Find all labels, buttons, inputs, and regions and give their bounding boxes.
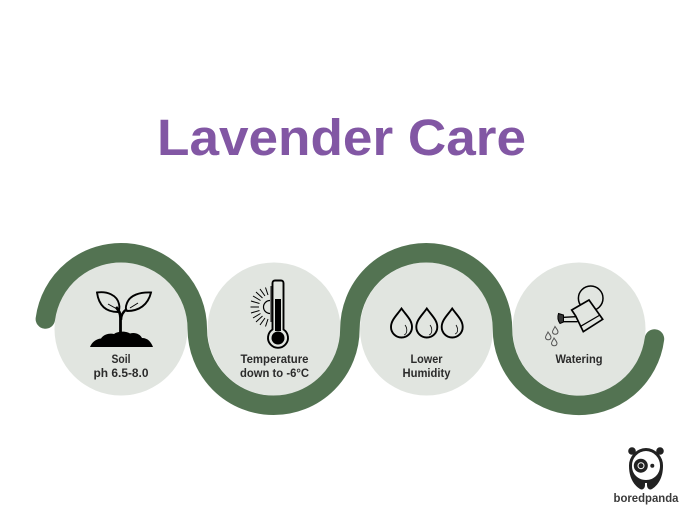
panel: soil circle <box>54 262 188 396</box>
panel: watering circle <box>512 262 646 396</box>
label: temperature: Temperature <box>240 354 308 366</box>
panel: temperature circle <box>208 262 340 396</box>
title: Lavender Care <box>157 109 526 166</box>
label: soil: ph 6.5-8.0 <box>94 368 148 380</box>
icon: thermometer with sun <box>250 280 288 348</box>
logo: boredpanda <box>614 447 679 505</box>
label: lower humidity: Humidity <box>402 368 451 380</box>
label: soil: Soil <box>112 354 130 366</box>
label: lower humidity <box>402 354 451 380</box>
winding green ribbon <box>45 253 654 405</box>
label: soil <box>94 354 148 380</box>
label: temperature: down to -6°C <box>240 368 309 380</box>
logo: boredpanda: boredpanda <box>614 493 679 505</box>
label: temperature <box>240 354 309 380</box>
icon: three water drops <box>391 308 463 338</box>
label: lower humidity: Lower <box>410 354 443 366</box>
icon: watering can <box>546 286 603 346</box>
icon: sprout in soil <box>90 292 153 347</box>
panel: humidity circle <box>360 262 493 396</box>
label: watering: Watering <box>556 354 602 366</box>
